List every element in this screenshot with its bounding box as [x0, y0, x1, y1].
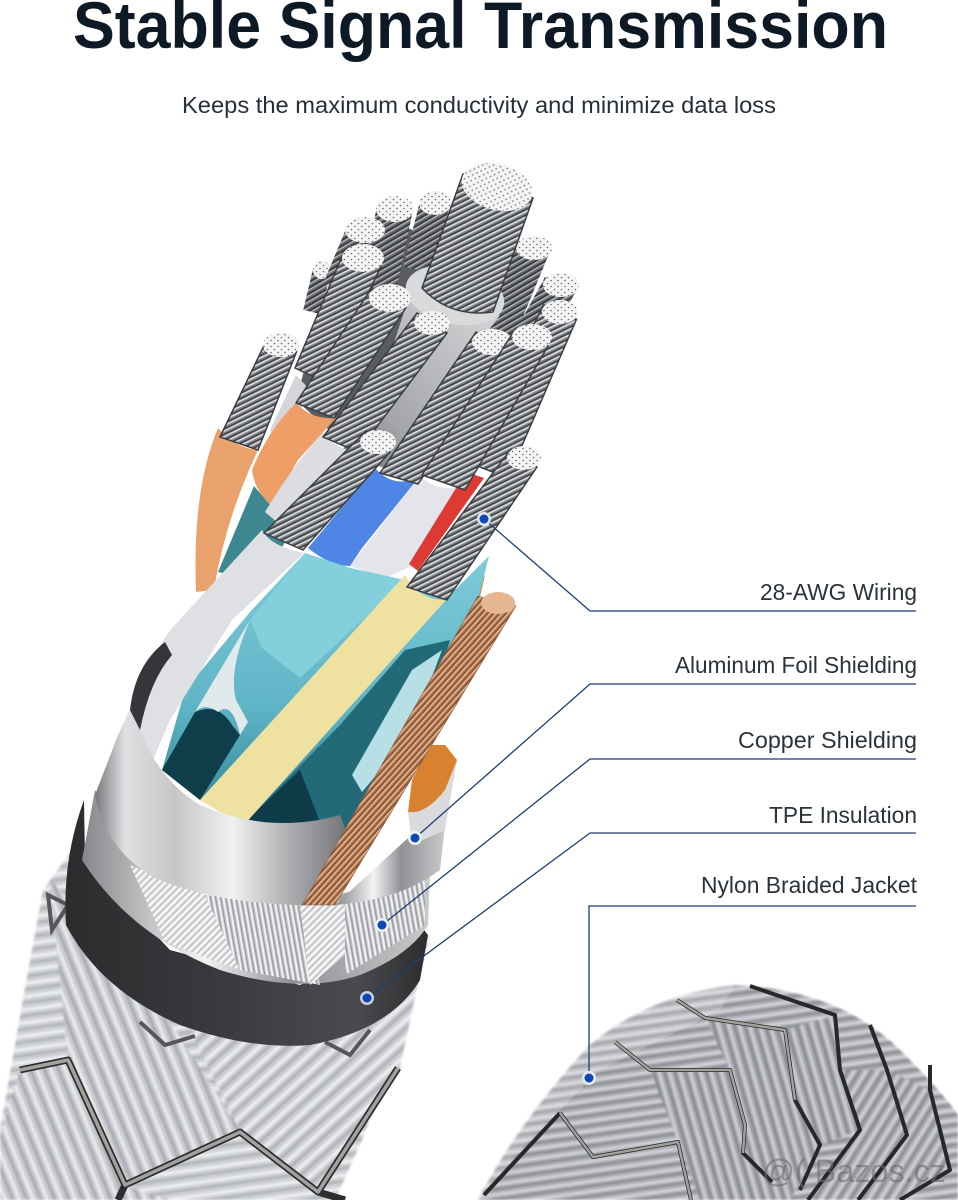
copper shielding strands: [302, 592, 516, 905]
aluminum foil bundle: [162, 553, 489, 835]
watermark: @( Bazos.cz: [762, 1153, 946, 1189]
callout: Nylon Braided Jacket: Nylon Braided Jacket: [701, 872, 918, 898]
strand with cap, centre: [323, 311, 450, 452]
rear bare strands: [312, 191, 579, 340]
white insulated wire, upper: [265, 432, 360, 535]
bare strands, right front: [380, 300, 578, 490]
left white wire: [132, 530, 304, 772]
black outer TPE band: [65, 800, 428, 1046]
callout: TPE Insulation: [360, 802, 917, 1005]
callout: 28-AWG Wiring: [477, 512, 917, 611]
upper-left bare strands: [295, 244, 411, 418]
callout: Nylon Braided Jacket: [582, 872, 918, 1085]
shadow core behind strands: [296, 215, 530, 470]
callout: Aluminum Foil Shielding: [408, 652, 917, 845]
bare strands, front: [264, 430, 541, 600]
subtitle: Keeps the maximum conductivity and minimize data loss: [182, 92, 776, 118]
callout: Aluminum Foil Shielding: Aluminum Foil Shielding: [675, 652, 917, 678]
right cable nylon braid: [478, 985, 958, 1200]
orange wire, second: [252, 375, 336, 506]
gathered colored insulation: [308, 468, 484, 578]
far-left bare strand: [220, 333, 299, 450]
knurled copper shield ring: [82, 790, 430, 985]
yellow wire: [200, 575, 446, 826]
central grey tube: [340, 300, 500, 470]
central thick bare conductor: [400, 155, 538, 334]
orange wire bowl: [408, 745, 457, 813]
silver foil ring: [95, 642, 457, 905]
nylon braided jacket, left cable: [0, 850, 430, 1200]
orange wire sliver behind foil: [455, 575, 485, 640]
callout: Copper Shielding: Copper Shielding: [738, 727, 917, 753]
callout: 28-AWG Wiring: 28-AWG Wiring: [760, 579, 917, 605]
callout: Copper Shielding: [375, 727, 917, 932]
orange wire, rear left: [195, 428, 292, 592]
callout: TPE Insulation: TPE Insulation: [769, 802, 917, 828]
